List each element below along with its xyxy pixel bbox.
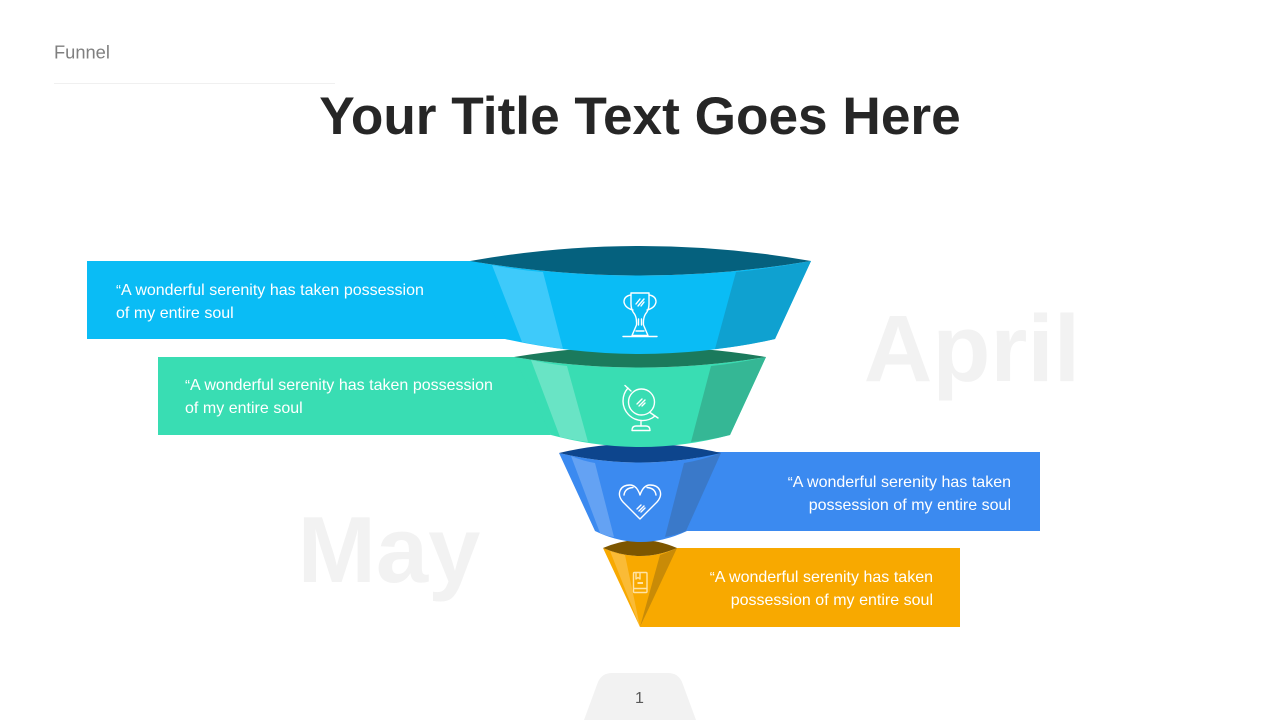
right shade 3 — [665, 453, 721, 537]
text: tier 2 — [185, 377, 493, 417]
section label: Funnel — [54, 42, 110, 62]
right shade 4 — [640, 548, 677, 627]
funnel body 2 — [514, 357, 766, 447]
text: tier 1: of my entire soul — [116, 305, 234, 322]
text: tier 4: “A wonderful serenity has taken — [710, 569, 933, 586]
funnel body 3 — [559, 453, 721, 542]
text: tier 4: possession of my entire soul — [731, 592, 933, 609]
panel: tier 4 — [603, 540, 960, 627]
panel: tier 1 — [87, 246, 811, 354]
text: tier 3: possession of my entire soul — [809, 497, 1011, 514]
title: Your Title Text Goes Here — [319, 87, 961, 146]
icon: globe — [623, 386, 658, 430]
banner 4 — [640, 548, 960, 627]
banner 1 — [87, 261, 510, 339]
panel: tier 2 — [158, 346, 766, 447]
text: tier 3 — [788, 474, 1011, 514]
watermark: April: April — [864, 296, 1080, 402]
text: tier 2: of my entire soul — [185, 400, 303, 417]
left highlight 2 — [531, 360, 588, 442]
funnel opening 3 — [559, 444, 721, 462]
funnel opening 1 — [470, 246, 811, 276]
page number: 1 — [635, 690, 644, 707]
left highlight 4 — [610, 551, 640, 627]
watermark: May: May — [298, 497, 480, 602]
panel: tier 3 — [559, 444, 1040, 542]
funnel opening 4 — [603, 540, 677, 556]
right shade 1 — [715, 261, 811, 349]
text: tier 4 — [710, 569, 933, 609]
icon: trophy — [623, 293, 657, 336]
icon: heart — [619, 485, 661, 519]
text: tier 2: “A wonderful serenity has taken possession — [185, 377, 493, 394]
banner 2 — [158, 357, 551, 435]
left highlight 3 — [571, 456, 614, 537]
funnel opening 2 — [514, 346, 766, 368]
text: tier 3: “A wonderful serenity has taken — [788, 474, 1011, 491]
text: tier 1: “A wonderful serenity has taken possession — [116, 282, 424, 299]
banner 3 — [670, 452, 1040, 531]
page number tab — [584, 673, 696, 720]
funnel body 4 — [603, 548, 677, 627]
icon: book — [634, 572, 647, 592]
funnel body 1 — [470, 261, 811, 354]
right shade 2 — [691, 357, 766, 442]
left highlight 1 — [492, 265, 563, 349]
text: tier 1 — [116, 282, 424, 322]
